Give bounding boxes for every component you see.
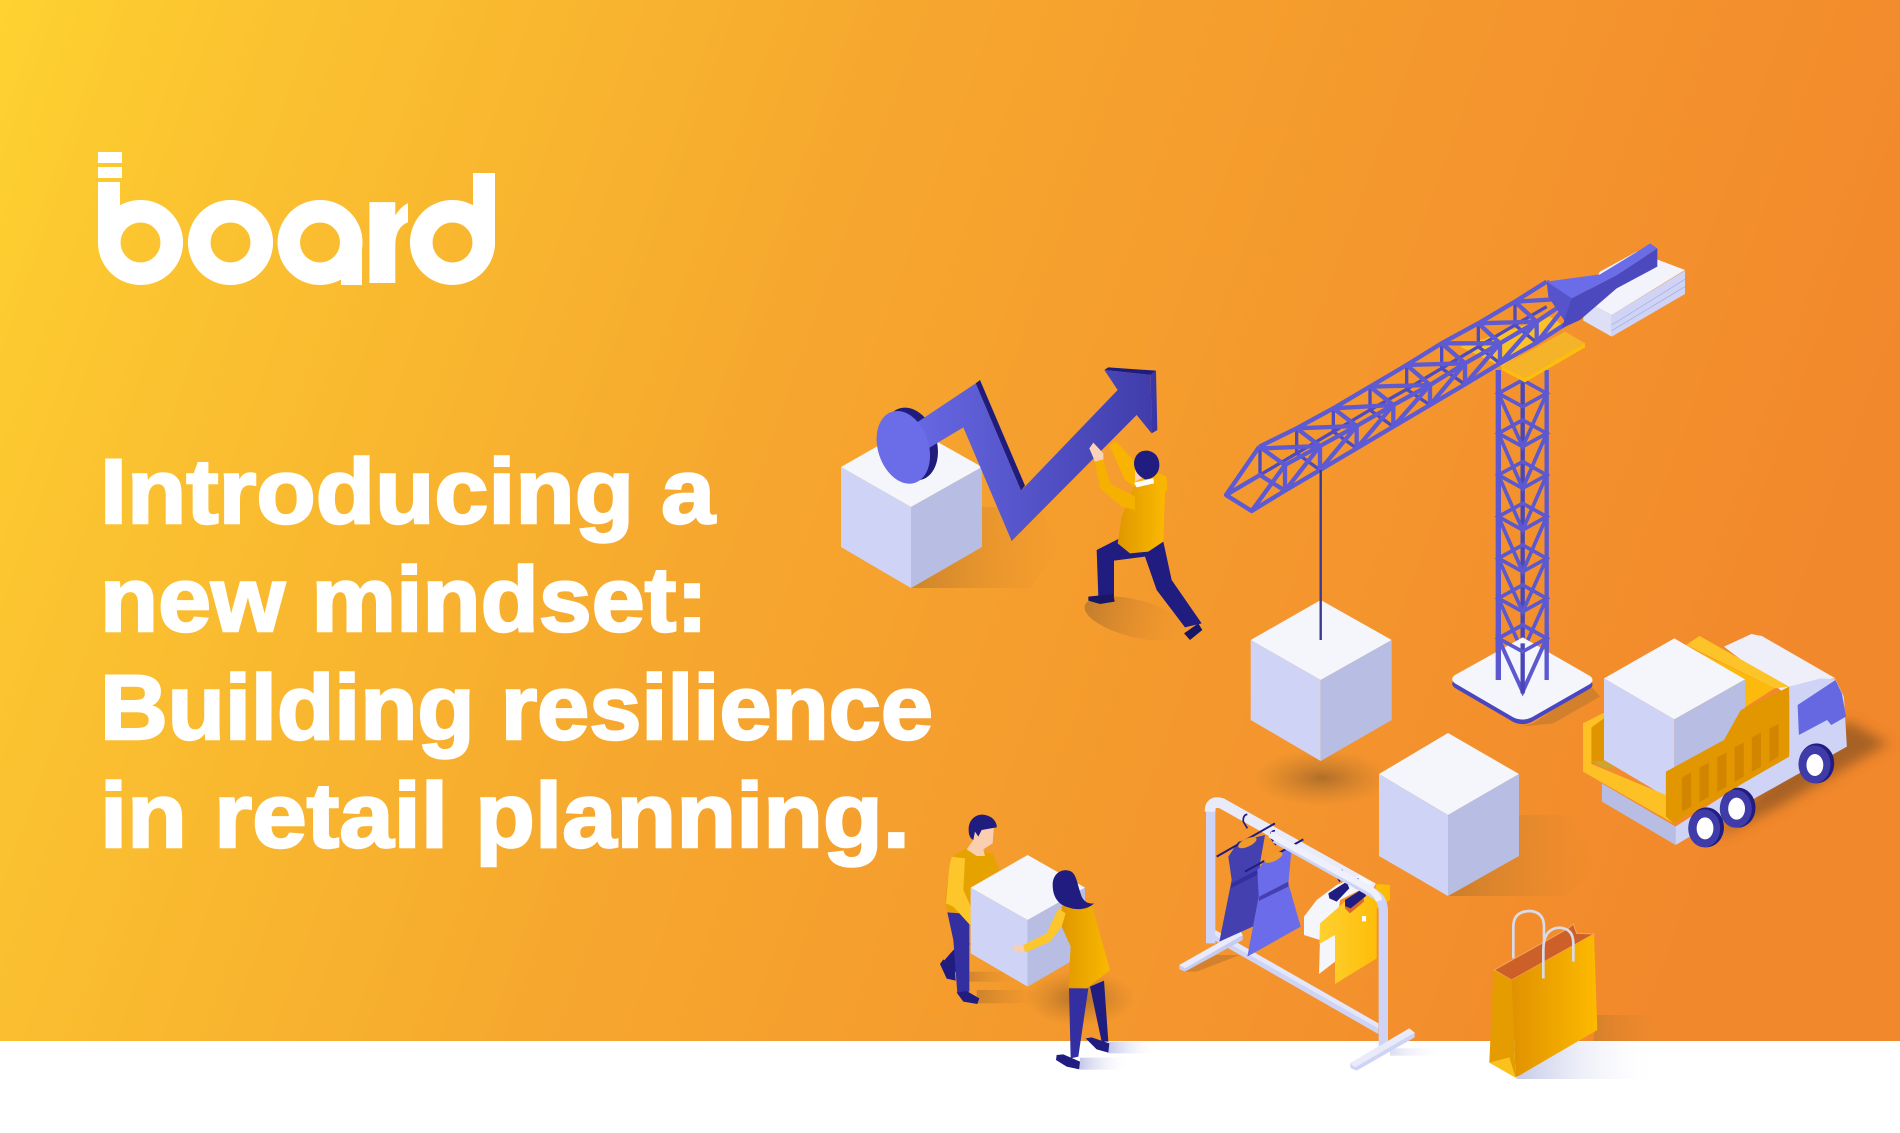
shadow: third cube: [1448, 815, 1602, 896]
white shirt: [1304, 870, 1373, 974]
bag shadow: [1516, 1015, 1670, 1079]
jacket: [1118, 482, 1165, 553]
figures carrying box: [940, 815, 1158, 1070]
crane base plate: [1452, 625, 1600, 727]
truck dump bed back: [1591, 636, 1789, 764]
cube: hanging from crane: [1251, 600, 1392, 761]
logo: board: board: [85, 146, 509, 318]
man carrying box: [940, 815, 999, 1004]
yellow shirt: [1319, 879, 1390, 984]
bag back handle: [1513, 911, 1544, 958]
yellow deck behind jib: [1460, 317, 1565, 367]
crane rope: [1319, 470, 1322, 640]
rack shadows: [1183, 955, 1447, 1056]
title: Building resilience: [100, 657, 933, 759]
truck wheels: [1688, 743, 1834, 847]
title: new mindset:: [100, 549, 708, 651]
rack frame back: [1179, 803, 1378, 1034]
bag interior: [1494, 924, 1594, 980]
cube: in truck: [1591, 638, 1745, 802]
light dress: [1245, 831, 1303, 957]
collar: [1134, 478, 1154, 487]
hair: [1134, 451, 1159, 479]
illustration: cube with growth arrow: [841, 367, 1157, 588]
truck cab: [1602, 634, 1847, 845]
bag front: [1512, 934, 1597, 1078]
legs: [1097, 539, 1202, 627]
truck: [1583, 634, 1888, 847]
cube: carried box: [971, 855, 1085, 987]
growth arrow: [868, 367, 1157, 541]
figure: man pushing arrow: [1080, 442, 1202, 649]
crane platform: [1502, 332, 1585, 382]
crane jib rear truss: [1260, 302, 1547, 475]
clothing rack: [1179, 803, 1447, 1071]
crane: [1226, 243, 1685, 693]
bag side: [1489, 970, 1516, 1078]
dark dress: [1217, 814, 1275, 942]
rack frame front: [1270, 834, 1415, 1071]
title: [100, 441, 933, 867]
truck shadow: [1711, 720, 1888, 840]
back arm: [1109, 442, 1167, 500]
crane counterweight slab: [1583, 252, 1685, 337]
floor shadows: [968, 972, 1018, 982]
truck dump bed front: [1583, 687, 1789, 823]
cube: middle floor: [1379, 733, 1519, 896]
shadow: hanging cube: [1254, 750, 1390, 806]
cube: under arrow: [841, 427, 982, 588]
hand: [1089, 443, 1103, 462]
front arm: [1095, 459, 1135, 510]
woman carrying box: [1013, 870, 1110, 1069]
title: in retail planning.: [100, 765, 910, 867]
title: Introducing a: [100, 441, 716, 543]
crane jib front truss: [1226, 282, 1572, 511]
shopping bag: [1489, 911, 1670, 1079]
crane head: [1547, 243, 1657, 328]
crane mast: [1498, 370, 1547, 693]
shadow: first cube: [911, 507, 1060, 588]
bag front handle: [1543, 928, 1573, 978]
